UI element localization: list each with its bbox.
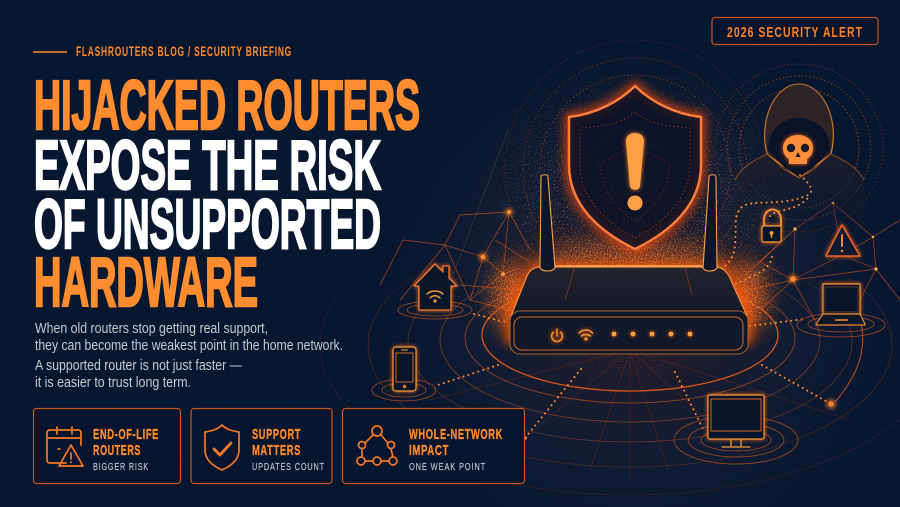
panel: end-of-life routers: BIGGER RISK: [93, 461, 149, 473]
status LEDs: [612, 332, 692, 336]
title: OF UNSUPPORTED: [34, 185, 381, 263]
body copy: A supported router is not just faster —: [35, 358, 242, 374]
panel: whole-network impact: WHOLE-NETWORK: [409, 426, 503, 443]
body copy: it is easier to trust long term.: [35, 375, 191, 391]
title: [34, 66, 420, 321]
panel: support matters: UPDATES COUNT: [252, 461, 325, 473]
shield with exclamation: [569, 86, 701, 249]
panel: whole-network impact: IMPACT: [409, 442, 449, 459]
network mesh: [380, 202, 900, 440]
hacker figure with skull: [730, 84, 868, 235]
panel: whole-network impact: [342, 408, 524, 484]
kicker line: FLASHROUTERS BLOG / SECURITY BRIEFING: [76, 44, 292, 59]
panel: whole-network impact: ONE WEAK POINT: [409, 461, 486, 473]
body copy: [35, 321, 343, 391]
router top case: [511, 267, 747, 316]
device: phone: [372, 347, 436, 401]
icon: padlock: [762, 210, 781, 242]
icon: skull: [783, 135, 813, 164]
title: HIJACKED ROUTERS: [34, 66, 420, 144]
body copy: they can become the weakest point in the home network.: [35, 338, 343, 354]
device: monitor: [674, 395, 798, 464]
router antennas: [540, 175, 717, 271]
device: laptop: [797, 284, 885, 337]
shield rings: [505, 40, 765, 300]
router: [510, 175, 748, 354]
title: EXPOSE THE RISK: [34, 126, 381, 204]
icon: power: [552, 329, 562, 342]
icon: network nodes: [357, 426, 397, 465]
body copy: When old routers stop getting real support,: [35, 321, 268, 337]
icon: shield check: [205, 425, 239, 470]
exclamation mark: [626, 133, 644, 210]
icon: warning triangle: [826, 225, 860, 256]
icon: wifi: [579, 330, 592, 340]
panel: support matters: SUPPORT: [252, 426, 301, 443]
panel: end-of-life routers: ROUTERS: [93, 442, 141, 459]
hood signal rings: [715, 64, 883, 232]
dotted attack paths: [438, 175, 831, 438]
icon: calendar with warning: [47, 427, 83, 466]
router front panel: [510, 311, 748, 354]
panel: support matters: [191, 408, 332, 484]
panel: support matters: MATTERS: [252, 442, 301, 459]
network rings around router: [320, 262, 900, 496]
title: HARDWARE: [34, 243, 258, 321]
orange glow and particles behind router: [470, 75, 800, 375]
panel: end-of-life routers: [34, 408, 180, 484]
panel: end-of-life routers: END-OF-LIFE: [93, 426, 159, 443]
alert badge: [712, 18, 878, 44]
device: house: [398, 264, 472, 319]
